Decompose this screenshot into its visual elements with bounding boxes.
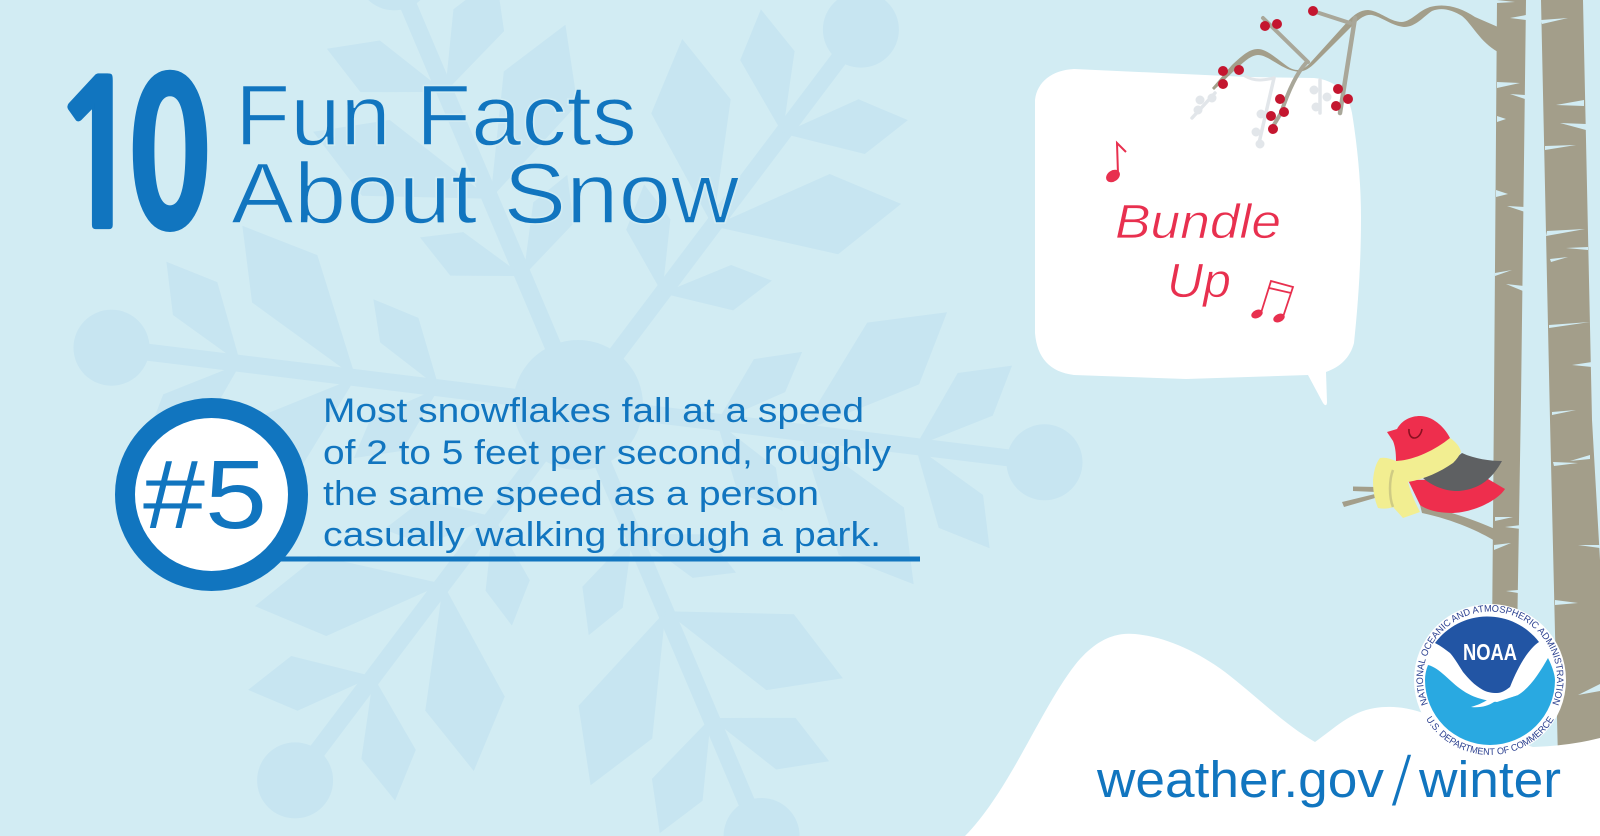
tree trunk right (1541, 0, 1600, 760)
background snowflake (74, 0, 1082, 836)
website url: winter (1418, 751, 1561, 808)
speech text: Up (1167, 255, 1231, 308)
fact text (323, 392, 891, 554)
fact text: of 2 to 5 feet per second, roughly (323, 434, 891, 472)
title digit 1: 1 (47, 58, 150, 257)
title line 1: Fun Facts (235, 68, 637, 164)
speech bubble (1035, 69, 1361, 405)
NOAA light blue field (1425, 658, 1555, 745)
fact text: casually walking through a park. (323, 516, 881, 554)
bird scarf (1373, 438, 1461, 518)
snow hill (965, 634, 1600, 836)
bird (1373, 416, 1505, 518)
title line 2: About Snow (231, 146, 740, 242)
bird head (1387, 416, 1452, 461)
title (47, 0, 740, 290)
bird tail and body (1408, 479, 1505, 513)
bird eye (1409, 429, 1422, 438)
NOAA gull (1471, 693, 1518, 707)
music note double (1251, 281, 1293, 323)
speech text (1115, 196, 1281, 308)
berries (1218, 6, 1353, 134)
tree trunk left (1492, 0, 1526, 640)
bird perch branch (1342, 486, 1495, 541)
music note single (1104, 143, 1126, 184)
NOAA wordmark: NOAA (1463, 639, 1517, 665)
fact text: the same speed as a person (323, 475, 819, 513)
NOAA ring text bottom: U.S. DEPARTMENT OF COMMERCE (1427, 716, 1554, 755)
berry branch (1212, 5, 1498, 134)
speech text: Bundle (1115, 196, 1281, 249)
website url: weather.gov (1096, 751, 1385, 808)
website url: / (1390, 742, 1413, 822)
fact number badge (125, 408, 920, 581)
NOAA ring text top: NATIONAL OCEANIC AND ATMOSPHERIC ADMINISTRATION (1416, 605, 1564, 706)
shadow branches on bubble (1192, 76, 1331, 148)
fact text: Most snowflakes fall at a speed (323, 392, 864, 430)
website url (1096, 742, 1561, 822)
fact number badge: #5 (143, 440, 267, 549)
bird wing (1423, 453, 1502, 491)
NOAA logo (1414, 604, 1566, 755)
NOAA dark blue field (1435, 616, 1539, 693)
